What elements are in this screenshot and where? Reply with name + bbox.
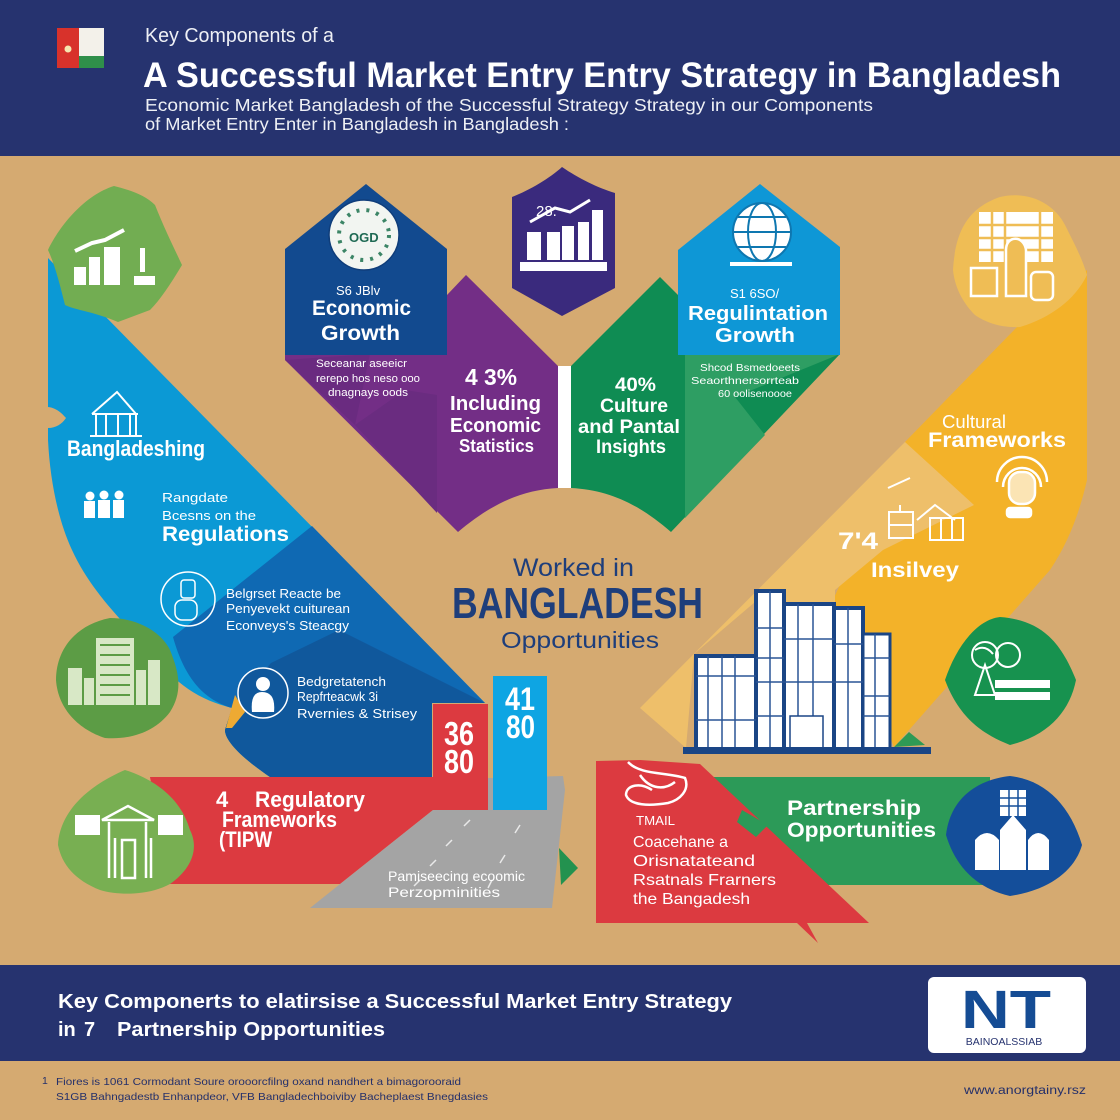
panel: red callout bbox=[596, 760, 869, 943]
text: strategy note: Belgrset Reacte be bbox=[226, 586, 341, 601]
text: centre heading: BANGLADESH bbox=[452, 579, 703, 628]
text: purple stat: 4 3% bbox=[465, 364, 517, 390]
bar: red: 36 bbox=[444, 715, 474, 752]
text: framework note: Bedgretatench bbox=[297, 674, 386, 689]
text: regulations: Bcesns on the bbox=[162, 508, 256, 523]
bar: blue: 80 bbox=[506, 709, 535, 745]
text: insilvey bbox=[838, 528, 959, 582]
text: economic growth: Economic bbox=[312, 297, 411, 320]
icon: portrait badge bbox=[226, 668, 288, 728]
footnote: 1 bbox=[42, 1075, 48, 1087]
text: callout body: Rsatnals Frarners bbox=[633, 872, 776, 889]
subtitle bbox=[145, 95, 873, 134]
text: framework note: Repfrteacwk 3i bbox=[297, 689, 378, 704]
divider white bbox=[558, 366, 571, 488]
text: framework note: Rvernies & Strisey bbox=[297, 706, 418, 721]
bar: blue bbox=[493, 676, 547, 810]
icon: economic dial: OGD bbox=[349, 230, 379, 245]
icon: flag bbox=[57, 28, 104, 68]
footer text: Key Componerts to elatirsise a Successful Market Entry Strategy bbox=[58, 991, 733, 1013]
panel: purple stats icon bbox=[512, 167, 615, 316]
bar: blue: 41 bbox=[505, 681, 535, 717]
website: www.anorgtainy.rsz bbox=[963, 1085, 1086, 1097]
subtitle: of Market Entry Enter in Bangladesh in Bangladesh : bbox=[145, 114, 569, 134]
heading: Bangladeshing: Bangladeshing bbox=[67, 436, 205, 461]
icon: mid right green badge bbox=[945, 617, 1076, 745]
icon: people bbox=[84, 490, 124, 518]
text: callout body: Coacehane a bbox=[633, 834, 728, 851]
header band bbox=[0, 0, 1120, 156]
text: economic growth: Growth bbox=[321, 322, 400, 345]
footnote: Fiores is 1061 Cormodant Soure orooorcfilng oxand nandhert a bimagorooraid bbox=[56, 1076, 461, 1088]
icon: top left green badge bbox=[48, 186, 182, 322]
text: green stat: Culture bbox=[600, 396, 668, 417]
text: left chevron note bbox=[316, 358, 420, 399]
text: economic growth: S6 JBlv bbox=[336, 283, 381, 298]
text: purple stat: Economic bbox=[450, 415, 541, 437]
icon: circle badge bbox=[161, 572, 215, 626]
text: partnership opportunities bbox=[787, 797, 936, 842]
footer band bbox=[0, 965, 1120, 1061]
text: economic growth bbox=[312, 283, 411, 345]
text: regulation growth: Growth bbox=[715, 325, 795, 347]
bar: red bbox=[433, 704, 488, 810]
text: regulation growth: S1 6SO/ bbox=[730, 286, 780, 301]
text: centre heading bbox=[452, 554, 703, 653]
text: right chevron note bbox=[691, 362, 800, 400]
text: regulations bbox=[162, 490, 289, 546]
text: partnership opportunities: Partnership bbox=[787, 797, 921, 820]
text: regulations: Regulations bbox=[162, 523, 289, 546]
text: callout body: Orisnatateand bbox=[633, 853, 755, 870]
subtitle: Economic Market Bangladesh of the Successful Strategy Strategy in our Components bbox=[145, 95, 873, 115]
panel: centre chevrons bbox=[285, 167, 840, 532]
text: road caption: Pamiseecing ecoomic bbox=[388, 868, 525, 884]
panel: right yellow ribbon bbox=[640, 270, 1087, 748]
footer text: Partnership Opportunities bbox=[117, 1019, 385, 1041]
panel: green partnership banner bbox=[705, 777, 990, 885]
text: strategy note: Penyevekt cuiturean bbox=[226, 601, 350, 616]
text: centre heading: Opportunities bbox=[501, 627, 659, 653]
panel: regulation growth bbox=[678, 184, 840, 355]
logo card bbox=[928, 977, 1086, 1053]
icon: globe bbox=[730, 203, 792, 264]
text: regulatory frameworks: 4 bbox=[216, 787, 229, 812]
logo card: BAINOALSSIAB bbox=[966, 1036, 1042, 1048]
icon: handshake bbox=[626, 762, 686, 805]
text: left chevron note: rerepo hos neso ooo bbox=[316, 373, 420, 385]
icon: top right yellow badge bbox=[953, 195, 1087, 327]
panel: red regulatory banner bbox=[150, 777, 433, 884]
text: strategy note: Econveys's Steacgy bbox=[226, 618, 350, 633]
text: regulatory frameworks: Regulatory bbox=[255, 787, 366, 812]
text: regulation growth bbox=[688, 286, 828, 347]
footer text bbox=[58, 991, 733, 1041]
panel: economic growth bbox=[285, 184, 447, 355]
icon: bottom right blue badge bbox=[946, 776, 1082, 896]
text: regulatory frameworks bbox=[216, 787, 366, 852]
text: road caption: Perzopminities bbox=[388, 884, 500, 900]
text: right chevron note: Shcod Bsmedoeets bbox=[700, 362, 800, 374]
text: left chevron note: Seceanar aseeicr bbox=[316, 358, 407, 370]
icon: fingerprint bbox=[997, 457, 1047, 517]
text: cultural frameworks: Cultural bbox=[942, 412, 1006, 432]
text: right chevron note: Seaorthnersorrteab bbox=[691, 375, 799, 387]
icon: government building bbox=[90, 392, 142, 436]
text: cultural frameworks bbox=[928, 412, 1066, 452]
bar: red: 80 bbox=[444, 743, 474, 780]
header kicker: Key Components of a bbox=[145, 25, 335, 47]
logo card: NT bbox=[961, 980, 1051, 1040]
text: regulatory frameworks: Frameworks bbox=[222, 807, 337, 832]
text: green stat bbox=[578, 375, 680, 458]
text: insilvey: 7'4 bbox=[838, 528, 879, 555]
text: green stat: and Pantal bbox=[578, 417, 680, 438]
panel: bars and road bbox=[310, 676, 578, 908]
icon: bottom left green badge bbox=[58, 770, 194, 894]
text: purple stat: Including bbox=[450, 393, 541, 415]
panel: purple stats icon: 28. bbox=[536, 203, 557, 220]
text: purple stat bbox=[450, 364, 541, 456]
title: A Successful Market Entry Entry Strategy in Bangladesh bbox=[143, 56, 1061, 95]
text: right chevron note: 60 oolisenoooe bbox=[718, 388, 792, 400]
text: regulation growth: Regulintation bbox=[688, 303, 828, 325]
icon: economic dial bbox=[329, 200, 399, 270]
text: regulatory frameworks: (TIPW bbox=[219, 827, 272, 852]
text: callout body bbox=[633, 813, 776, 908]
icon: mid left green badge bbox=[56, 618, 178, 738]
text: centre heading: Worked in bbox=[513, 554, 634, 582]
text: insilvey: Insilvey bbox=[871, 559, 959, 582]
text: regulations: Rangdate bbox=[162, 490, 228, 505]
icon: office building bbox=[683, 591, 931, 754]
text: purple stat: Statistics bbox=[459, 436, 534, 456]
icon: sketches bbox=[888, 478, 963, 540]
footer text: 7 bbox=[84, 1019, 95, 1041]
text: partnership opportunities: Opportunities bbox=[787, 819, 936, 842]
text: cultural frameworks: Frameworks bbox=[928, 429, 1066, 452]
panel: left blue ribbon bbox=[48, 258, 485, 777]
footer text: in bbox=[58, 1019, 76, 1041]
footnote: S1GB Bahngadestb Enhanpdeor, VFB Bangladechboiviby Bacheplaest Bnegdasies bbox=[56, 1091, 488, 1103]
text: left chevron note: dnagnays oods bbox=[328, 387, 409, 399]
text: callout body: TMAIL bbox=[636, 813, 675, 828]
text: strategy note bbox=[226, 586, 350, 633]
text: green stat: 40% bbox=[615, 375, 656, 396]
arrow: green bbox=[559, 848, 578, 885]
footnote bbox=[42, 1075, 488, 1103]
text: road caption bbox=[388, 868, 525, 900]
text: green stat: Insights bbox=[596, 437, 666, 458]
text: callout body: the Bangadesh bbox=[633, 891, 750, 908]
text: framework note bbox=[297, 674, 418, 721]
